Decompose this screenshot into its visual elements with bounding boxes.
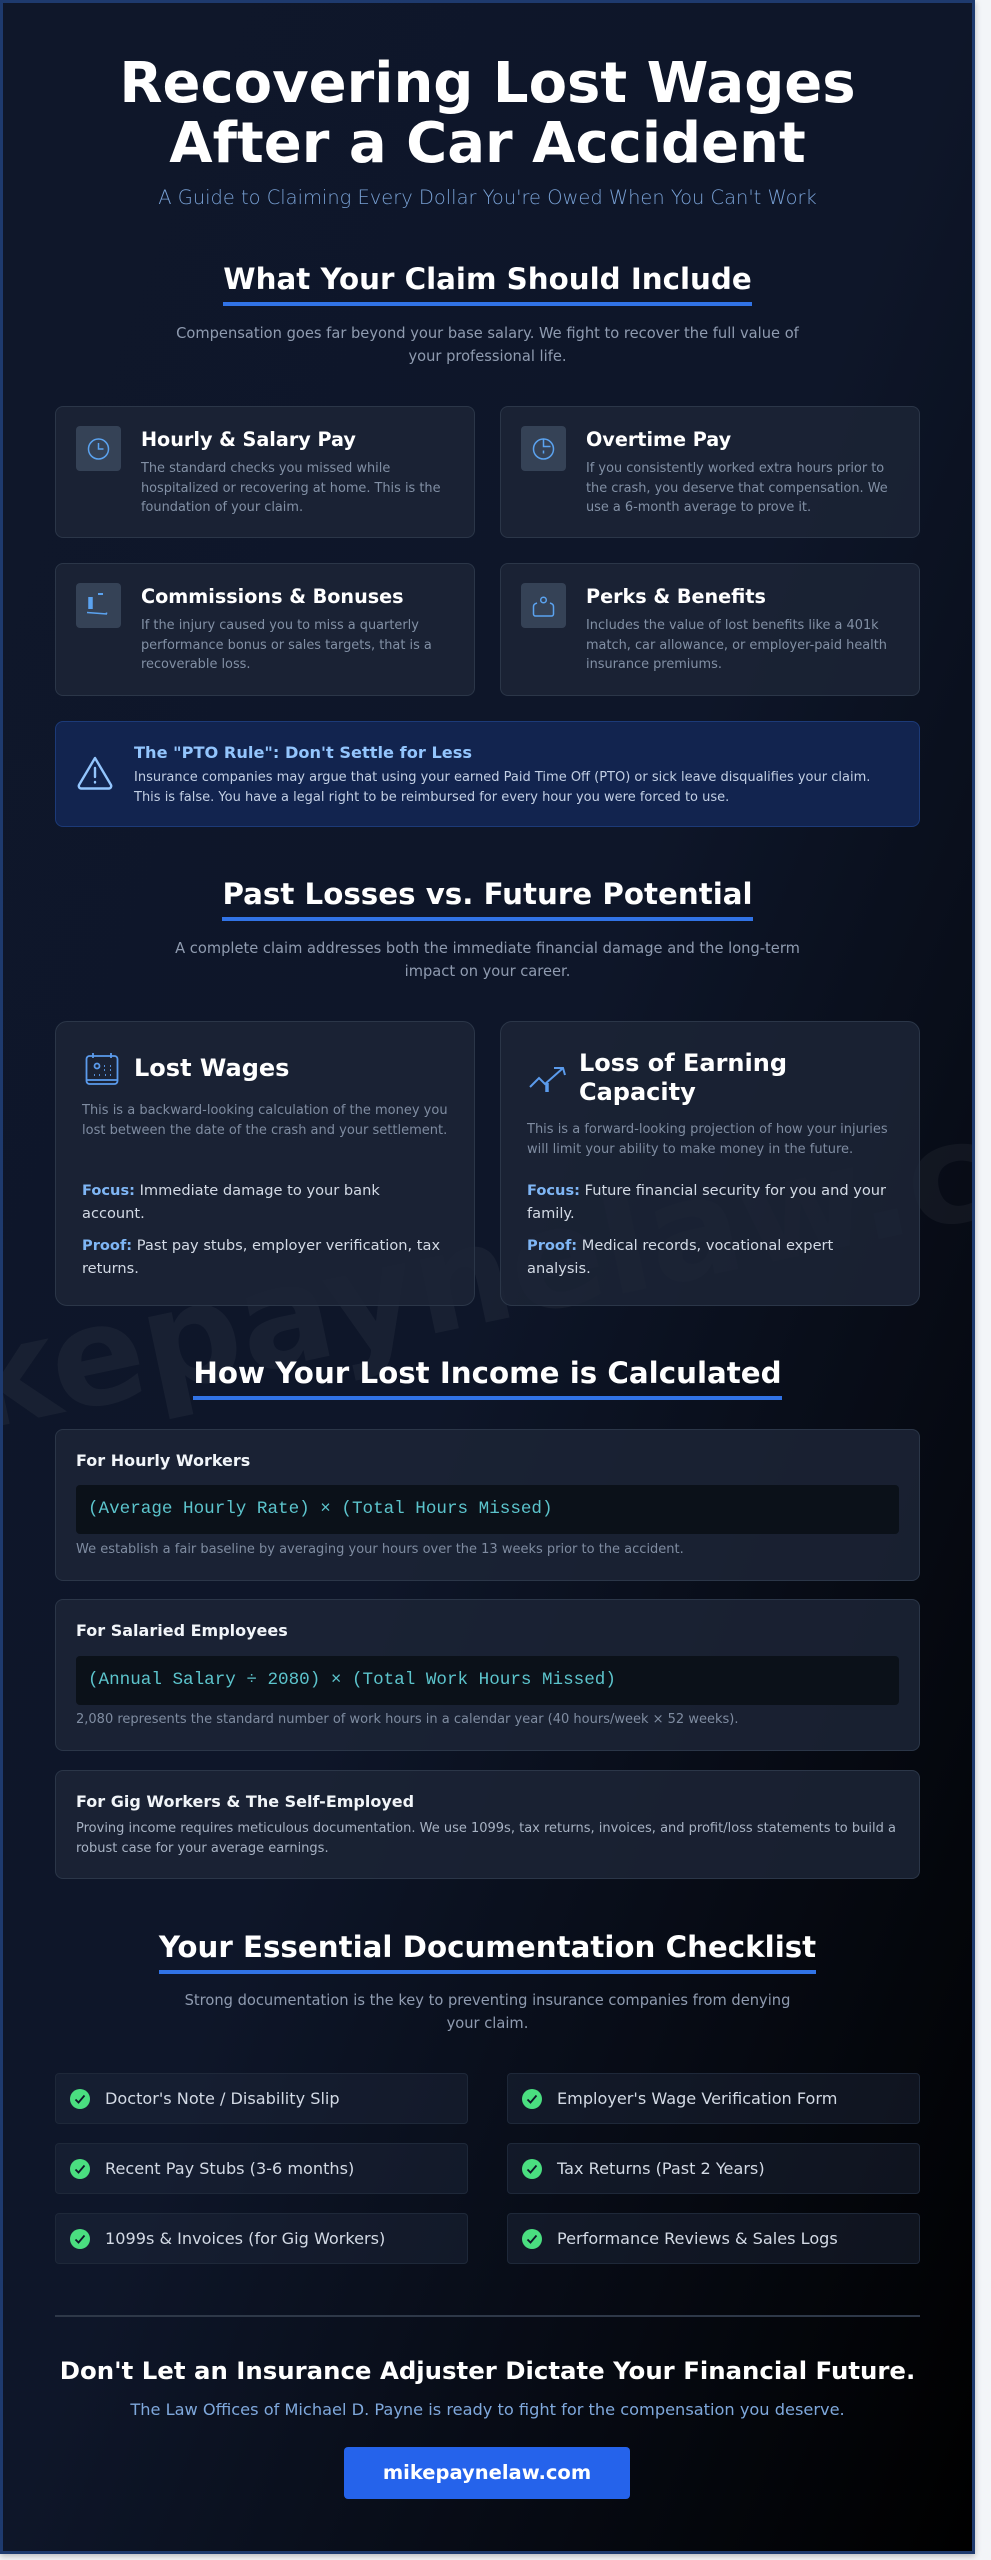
checklist item — [55, 2073, 468, 2124]
panel: perks and benefits: Perks & Benefits — [586, 585, 766, 608]
panel: salaried employees formula: For Salaried Employees — [76, 1621, 288, 1640]
section intro: your claim. — [447, 2015, 528, 2032]
checklist item: Employer's Wage Verification Form — [557, 2089, 837, 2108]
panel: loss of earning capacity — [500, 1021, 920, 1306]
call to action button — [344, 2447, 630, 2499]
panel: gig workers — [55, 1770, 920, 1879]
icon: calendar — [86, 1053, 118, 1085]
panel: hourly and salary pay: The standard checks you missed while — [141, 461, 390, 476]
callout text: Insurance companies may argue that using your earned Paid Time Off (PTO) or sick leave disqualifies your claim. — [134, 770, 870, 785]
checklist item: Performance Reviews & Sales Logs — [557, 2229, 838, 2248]
title — [119, 51, 856, 176]
panel: perks and benefits: Includes the value of lost benefits like a 401k — [586, 618, 879, 633]
section intro: Compensation goes far beyond your base salary. We fight to recover the full value of — [176, 325, 799, 342]
section intro: impact on your career. — [405, 963, 570, 980]
icon: overtime clock — [521, 426, 566, 471]
panel: hourly workers formula: For Hourly Workers — [76, 1451, 250, 1470]
footer text: The Law Offices of Michael D. Payne is ready to fight for the compensation you deserve. — [130, 2400, 845, 2419]
panel: overtime pay: the crash, you deserve that compensation. We — [586, 480, 888, 496]
checklist item: 1099s & Invoices (for Gig Workers) — [105, 2229, 385, 2248]
panel: hourly and salary pay: hospitalized or recovering at home. This is the — [141, 480, 441, 496]
section intro: A complete claim addresses both the immediate financial damage and the long-term — [175, 940, 800, 957]
panel: gig workers: robust case for your average earnings. — [76, 1840, 329, 1856]
checklist item — [507, 2143, 920, 2194]
checklist item: Recent Pay Stubs (3-6 months) — [105, 2159, 354, 2178]
panel: hourly and salary pay: Hourly & Salary Pay — [141, 428, 356, 451]
panel: commissions and bonuses: performance bonus or sales targets, that is a — [141, 638, 432, 652]
heading: how your lost income is calculated: How Your Lost Income is Calculated — [193, 1356, 782, 1390]
panel: hourly and salary pay: foundation of your claim. — [141, 500, 303, 515]
panel: overtime pay: If you consistently worked extra hours prior to — [586, 461, 884, 476]
checklist item — [55, 2213, 468, 2264]
panel: loss of earning capacity: Focus: Future financial security for you and your — [527, 1182, 886, 1199]
panel: loss of earning capacity: will limit your ability to make money in the future. — [527, 1142, 853, 1156]
panel: hourly and salary pay — [55, 406, 475, 538]
formula — [76, 1656, 899, 1705]
panel: hourly workers formula: We establish a fair baseline by averaging your hours over the 13 weeks prior to the accident. — [76, 1542, 684, 1557]
icon: benefits bag — [521, 583, 566, 628]
panel: overtime pay — [500, 406, 920, 538]
panel: gig workers: For Gig Workers & The Self-Employed — [76, 1792, 414, 1811]
subtitle: A Guide to Claiming Every Dollar You're Owed When You Can't Work — [158, 186, 817, 209]
heading: past losses vs future potential: Past Losses vs. Future Potential — [222, 877, 753, 911]
callout title: The "PTO Rule": Don't Settle for Less — [134, 743, 472, 762]
panel: commissions and bonuses: Commissions & Bonuses — [141, 585, 404, 608]
section intro: your professional life. — [408, 348, 567, 365]
panel: salaried employees formula — [55, 1599, 920, 1751]
panel: loss of earning capacity: Proof: Medical records, vocational expert — [527, 1237, 833, 1254]
checklist item: Tax Returns (Past 2 Years) — [557, 2159, 765, 2178]
panel: overtime pay: Overtime Pay — [586, 428, 731, 451]
panel: loss of earning capacity: Capacity — [579, 1078, 696, 1106]
heading: documentation checklist: Your Essential Documentation Checklist — [159, 1930, 816, 1964]
panel: commissions and bonuses: If the injury caused you to miss a quarterly — [141, 618, 419, 633]
section intro — [175, 940, 800, 980]
title: Recovering Lost Wages — [119, 51, 856, 116]
callout text — [134, 770, 870, 804]
panel: commissions and bonuses — [55, 563, 475, 696]
panel: lost wages: account. — [82, 1205, 145, 1222]
icon: rising arrows — [529, 1067, 566, 1092]
panel: lost wages — [55, 1021, 475, 1306]
section intro — [185, 1992, 790, 2032]
panel: loss of earning capacity: Loss of Earning — [579, 1049, 787, 1077]
icon: clock — [76, 426, 121, 471]
icon: warning triangle — [78, 756, 112, 790]
panel: loss of earning capacity: family. — [527, 1205, 575, 1222]
panel: perks and benefits — [500, 563, 920, 696]
panel: perks and benefits: match, car allowance, or employer-paid health — [586, 638, 887, 652]
checklist item — [507, 2073, 920, 2124]
panel: overtime pay: use a 6-month average to prove it. — [586, 500, 811, 515]
panel: hourly workers formula — [55, 1429, 920, 1581]
panel: perks and benefits: insurance premiums. — [586, 657, 722, 672]
panel: lost wages: returns. — [82, 1260, 139, 1277]
formula: (Annual Salary ÷ 2080) × (Total Work Hours Missed) — [88, 1670, 616, 1690]
panel: loss of earning capacity: analysis. — [527, 1260, 591, 1277]
panel: lost wages: Proof: Past pay stubs, employer verification, tax — [82, 1237, 440, 1254]
formula — [76, 1485, 899, 1534]
panel: loss of earning capacity: This is a forward-looking projection of how your injuries — [527, 1122, 888, 1137]
checklist item — [55, 2143, 468, 2194]
checklist item — [507, 2213, 920, 2264]
footer headline: Don't Let an Insurance Adjuster Dictate Your Financial Future. — [60, 2356, 915, 2385]
title: After a Car Accident — [169, 111, 806, 176]
formula: (Average Hourly Rate) × (Total Hours Missed) — [88, 1499, 553, 1519]
section intro — [176, 325, 800, 365]
panel: salaried employees formula: 2,080 represents the standard number of work hours in a calendar year (40 hours/week × 52 weeks). — [76, 1712, 738, 1727]
icon: commission chart — [76, 583, 121, 628]
panel: lost wages: This is a backward-looking calculation of the money you — [82, 1103, 448, 1118]
panel: commissions and bonuses: recoverable loss. — [141, 657, 250, 672]
panel: lost wages: lost between the date of the crash and your settlement. — [82, 1122, 447, 1138]
section intro: Strong documentation is the key to preventing insurance companies from denying — [185, 1992, 790, 2009]
call to action button: mikepaynelaw.com — [383, 2461, 591, 2484]
checklist item: Doctor's Note / Disability Slip — [105, 2089, 340, 2108]
callout text: This is false. You have a legal right to be reimbursed for every hour you were forced to use. — [134, 790, 729, 804]
panel: gig workers: Proving income requires meticulous documentation. We use 1099s, tax returns, invoices, and profit/loss statements to build a — [76, 1821, 896, 1836]
heading: what your claim should include: What Your Claim Should Include — [223, 262, 752, 296]
callout: PTO rule — [55, 721, 920, 827]
panel: lost wages: Focus: Immediate damage to your bank — [82, 1182, 380, 1199]
panel: lost wages: Lost Wages — [134, 1054, 289, 1082]
